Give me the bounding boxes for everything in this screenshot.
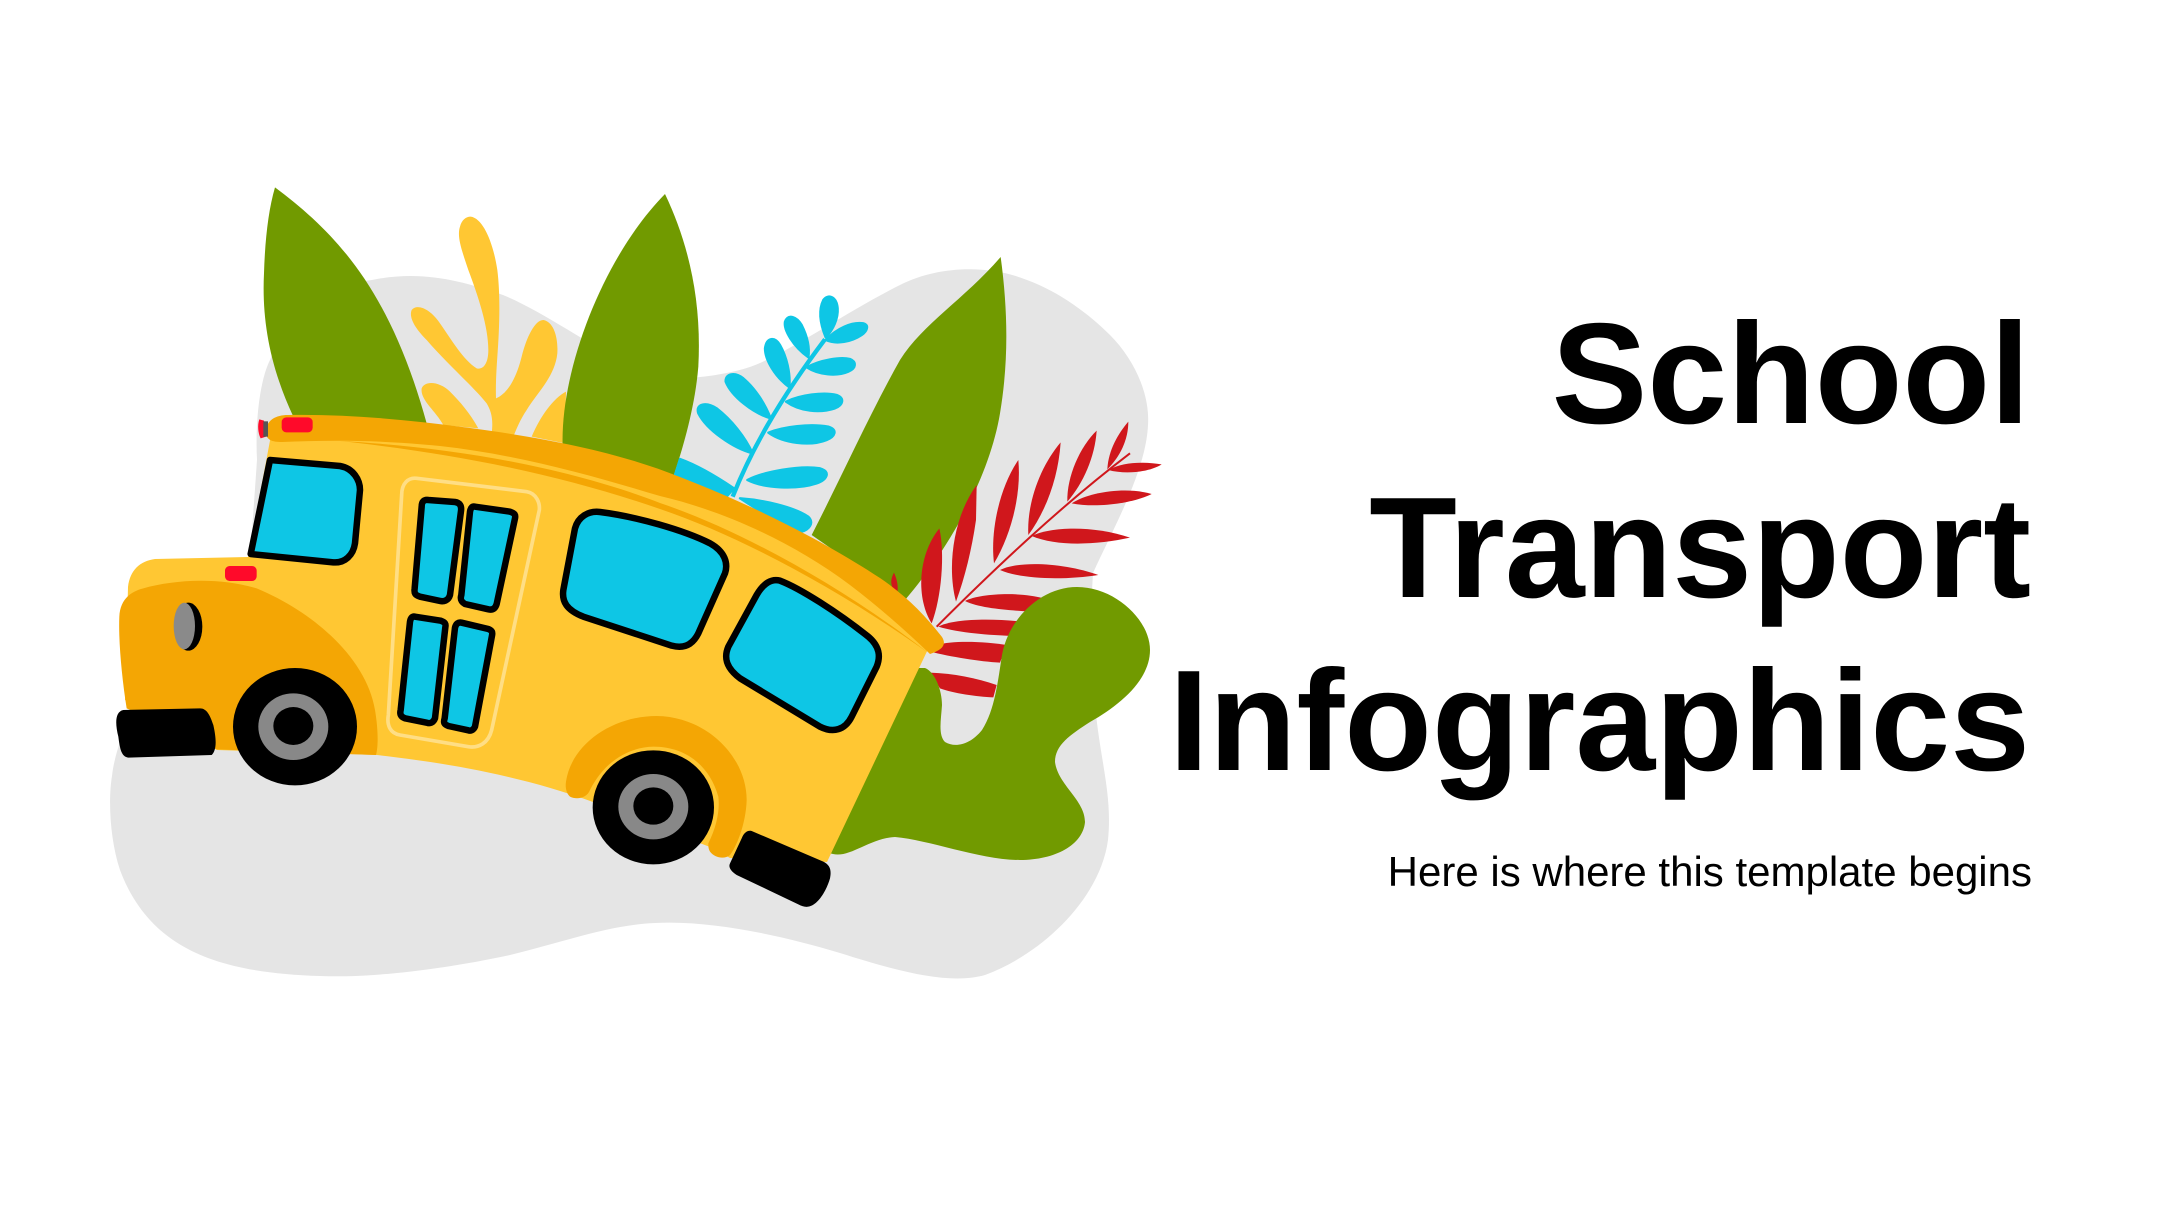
green leaf middle [563,194,699,477]
door windows [400,500,515,731]
door frame [388,478,539,747]
background gray blob [110,269,1148,978]
front bumper [116,708,216,758]
front wheel [233,668,357,785]
rear wheel [593,750,714,864]
bus roof [266,415,944,654]
illustration: school bus with foliage [110,187,1162,978]
windshield [251,460,360,562]
roof stripe [340,441,927,652]
subtitle: Here is where this template begins [1388,848,2032,895]
roof marker lights [258,417,313,438]
rear bumper [729,831,831,907]
bus hood [119,581,378,755]
rear wheel arch [566,716,747,858]
title: Transport [1369,468,2031,628]
bus body [125,429,930,862]
green blob behind bus [815,587,1150,860]
title [1169,294,2031,801]
hood marker light [225,566,257,581]
title: School [1552,294,2030,454]
yellow plant [411,217,566,443]
red fern [891,422,1162,697]
side window rear [726,580,879,730]
green leaf left [264,187,427,423]
title: Infographics [1169,641,2030,801]
headlight [174,603,202,651]
side window middle [563,512,726,647]
green leaf right [812,257,1006,600]
blue fern [675,297,867,532]
